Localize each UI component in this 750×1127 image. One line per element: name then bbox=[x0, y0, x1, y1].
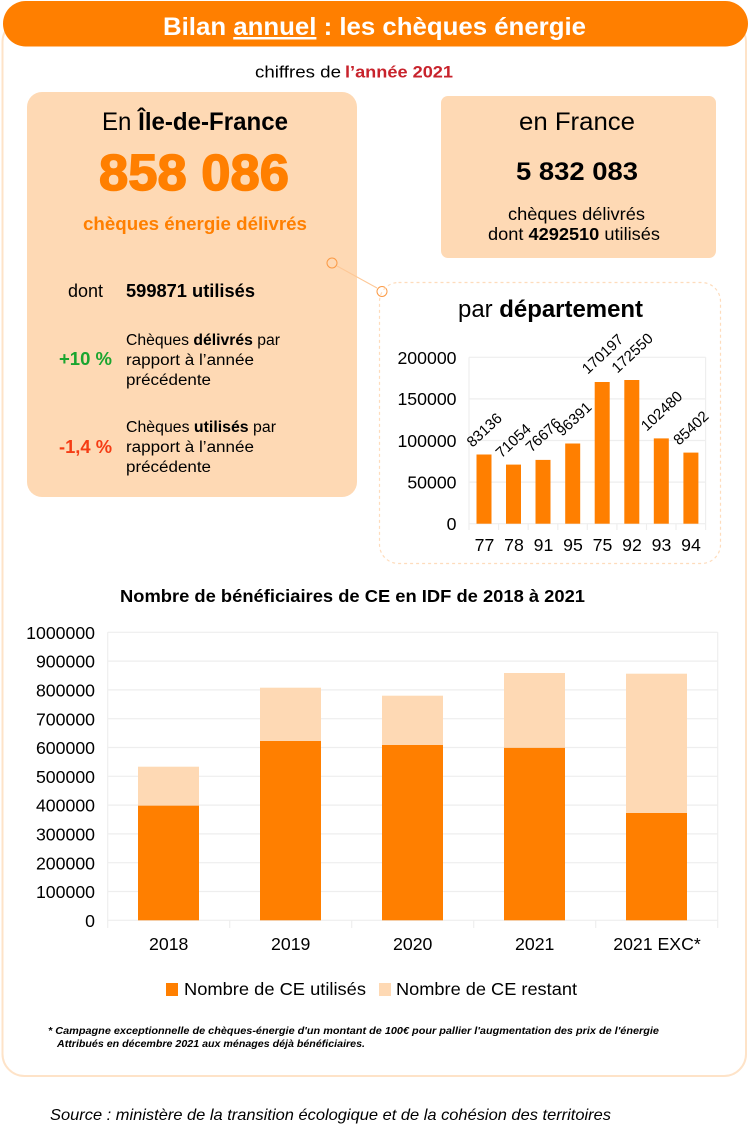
bar chart: department: 170197 bbox=[579, 331, 627, 378]
legend bbox=[166, 979, 577, 999]
bar chart: department: 0 bbox=[447, 514, 457, 534]
bar chart: department: 71054 bbox=[493, 421, 535, 462]
used cheques: 599871 utilisés bbox=[126, 281, 255, 301]
stacked bar chart: beneficiaries: 700000 bbox=[36, 709, 95, 729]
bar chart: department: 94 bbox=[681, 535, 701, 555]
caption: France cheques: chèques délivrés bbox=[508, 204, 645, 224]
stat: used change: Chèques utilisés par bbox=[126, 419, 276, 436]
bar chart: department: 76676 bbox=[523, 415, 565, 456]
panel: par département bbox=[380, 282, 720, 564]
stacked bar chart: beneficiaries: 100000 bbox=[36, 882, 95, 902]
stacked bar chart: beneficiaries: 300000 bbox=[36, 824, 95, 844]
caption: France cheques bbox=[488, 204, 660, 244]
bar chart: department: 150000 bbox=[397, 389, 457, 409]
caption: France cheques: dont 4292510 utilisés bbox=[488, 224, 660, 244]
bar chart: department bbox=[397, 330, 712, 555]
stacked bar chart: beneficiaries: 2021 bbox=[515, 934, 554, 954]
subtitle bbox=[255, 62, 453, 82]
heading: En Île-de-France: En Île-de-France bbox=[102, 106, 288, 136]
stat: delivered change bbox=[59, 332, 280, 389]
bar chart: department: 100000 bbox=[397, 431, 457, 451]
bar chart: department: 200000 bbox=[397, 348, 457, 368]
stacked bar chart: beneficiaries: 400000 bbox=[36, 796, 95, 816]
stacked bar chart: beneficiaries: 900000 bbox=[36, 652, 95, 672]
key figure: 5 832 083: 5 832 083 bbox=[516, 158, 638, 186]
stacked bar chart: beneficiaries: 600000 bbox=[36, 738, 95, 758]
panel: Île-de-France bbox=[27, 92, 357, 497]
chart title: Nombre de bénéficiaires de CE en IDF de 2018 à 2021 bbox=[120, 586, 585, 606]
heading: par département: par département bbox=[458, 296, 643, 323]
panel: France bbox=[441, 96, 716, 258]
bar chart: department: 50000 bbox=[407, 472, 457, 492]
caption: chèques énergie délivrés: chèques énergie délivrés bbox=[83, 213, 307, 234]
key figure: 858 086: 858 086 bbox=[99, 144, 289, 201]
stat: used change bbox=[59, 419, 276, 476]
stat: delivered change: rapport à l’année bbox=[126, 352, 254, 369]
stat: used change: rapport à l’année bbox=[126, 439, 254, 456]
bar chart: department: 93 bbox=[652, 535, 671, 555]
bar chart: department: 91 bbox=[534, 535, 553, 555]
bar chart: department: 85402 bbox=[670, 408, 712, 449]
stat: used change: précédente bbox=[126, 459, 211, 476]
footnote: * Campagne exceptionnelle de chèques-énergie d'un montant de 100€ pour pallier l'augmentation des prix de l'énergie bbox=[48, 1025, 659, 1037]
bar chart: department: 95 bbox=[563, 535, 583, 555]
stacked bar chart: beneficiaries: 1000000 bbox=[26, 623, 95, 643]
heading: en France: en France bbox=[519, 108, 635, 136]
stacked bar chart: beneficiaries: 2020 bbox=[393, 934, 433, 954]
used cheques: dont bbox=[68, 281, 103, 301]
bar chart: department: 92 bbox=[622, 535, 642, 555]
connector line between panels bbox=[327, 258, 387, 296]
footnote bbox=[48, 1025, 659, 1050]
stat: used change: -1,4 % bbox=[59, 437, 112, 457]
bar chart: department: 96391 bbox=[553, 399, 595, 440]
stacked bar chart: beneficiaries: 0 bbox=[85, 911, 95, 931]
subtitle: l’année 2021 bbox=[345, 62, 453, 82]
stacked bar chart: beneficiaries: 2019 bbox=[271, 934, 310, 954]
bar chart: department: 77 bbox=[475, 535, 494, 555]
stacked bar chart: beneficiaries: 800000 bbox=[36, 680, 95, 700]
bar chart: department: 102480 bbox=[638, 388, 686, 435]
legend: Nombre de CE utilisés bbox=[184, 979, 366, 999]
bar chart: department: 83136 bbox=[464, 410, 506, 451]
bar chart: department: 172550 bbox=[609, 330, 657, 377]
stat: delivered change: Chèques délivrés par bbox=[126, 332, 280, 349]
stacked bar chart: beneficiaries bbox=[26, 623, 718, 954]
legend: Nombre de CE restant bbox=[396, 979, 577, 999]
used cheques bbox=[68, 281, 255, 301]
footnote: Attribués en décembre 2021 aux ménages déjà bénéficiaires. bbox=[56, 1038, 365, 1050]
stacked bar chart: beneficiaries: 500000 bbox=[36, 767, 95, 787]
stat: delivered change: précédente bbox=[126, 372, 211, 389]
title banner bbox=[3, 1, 748, 46]
subtitle: chiffres de bbox=[255, 62, 341, 82]
title banner: Bilan annuel : les chèques énergie bbox=[163, 13, 586, 41]
stacked bar chart: beneficiaries: 200000 bbox=[36, 853, 95, 873]
stacked bar chart: beneficiaries: 2018 bbox=[149, 934, 189, 954]
bar chart: department: 78 bbox=[504, 535, 524, 555]
bar chart: department: 75 bbox=[593, 535, 612, 555]
stacked bar chart: beneficiaries: 2021 EXC* bbox=[613, 934, 701, 954]
stat: delivered change: +10 % bbox=[59, 349, 112, 369]
source: Source : ministère de la transition écologique et de la cohésion des territoires bbox=[50, 1107, 611, 1124]
